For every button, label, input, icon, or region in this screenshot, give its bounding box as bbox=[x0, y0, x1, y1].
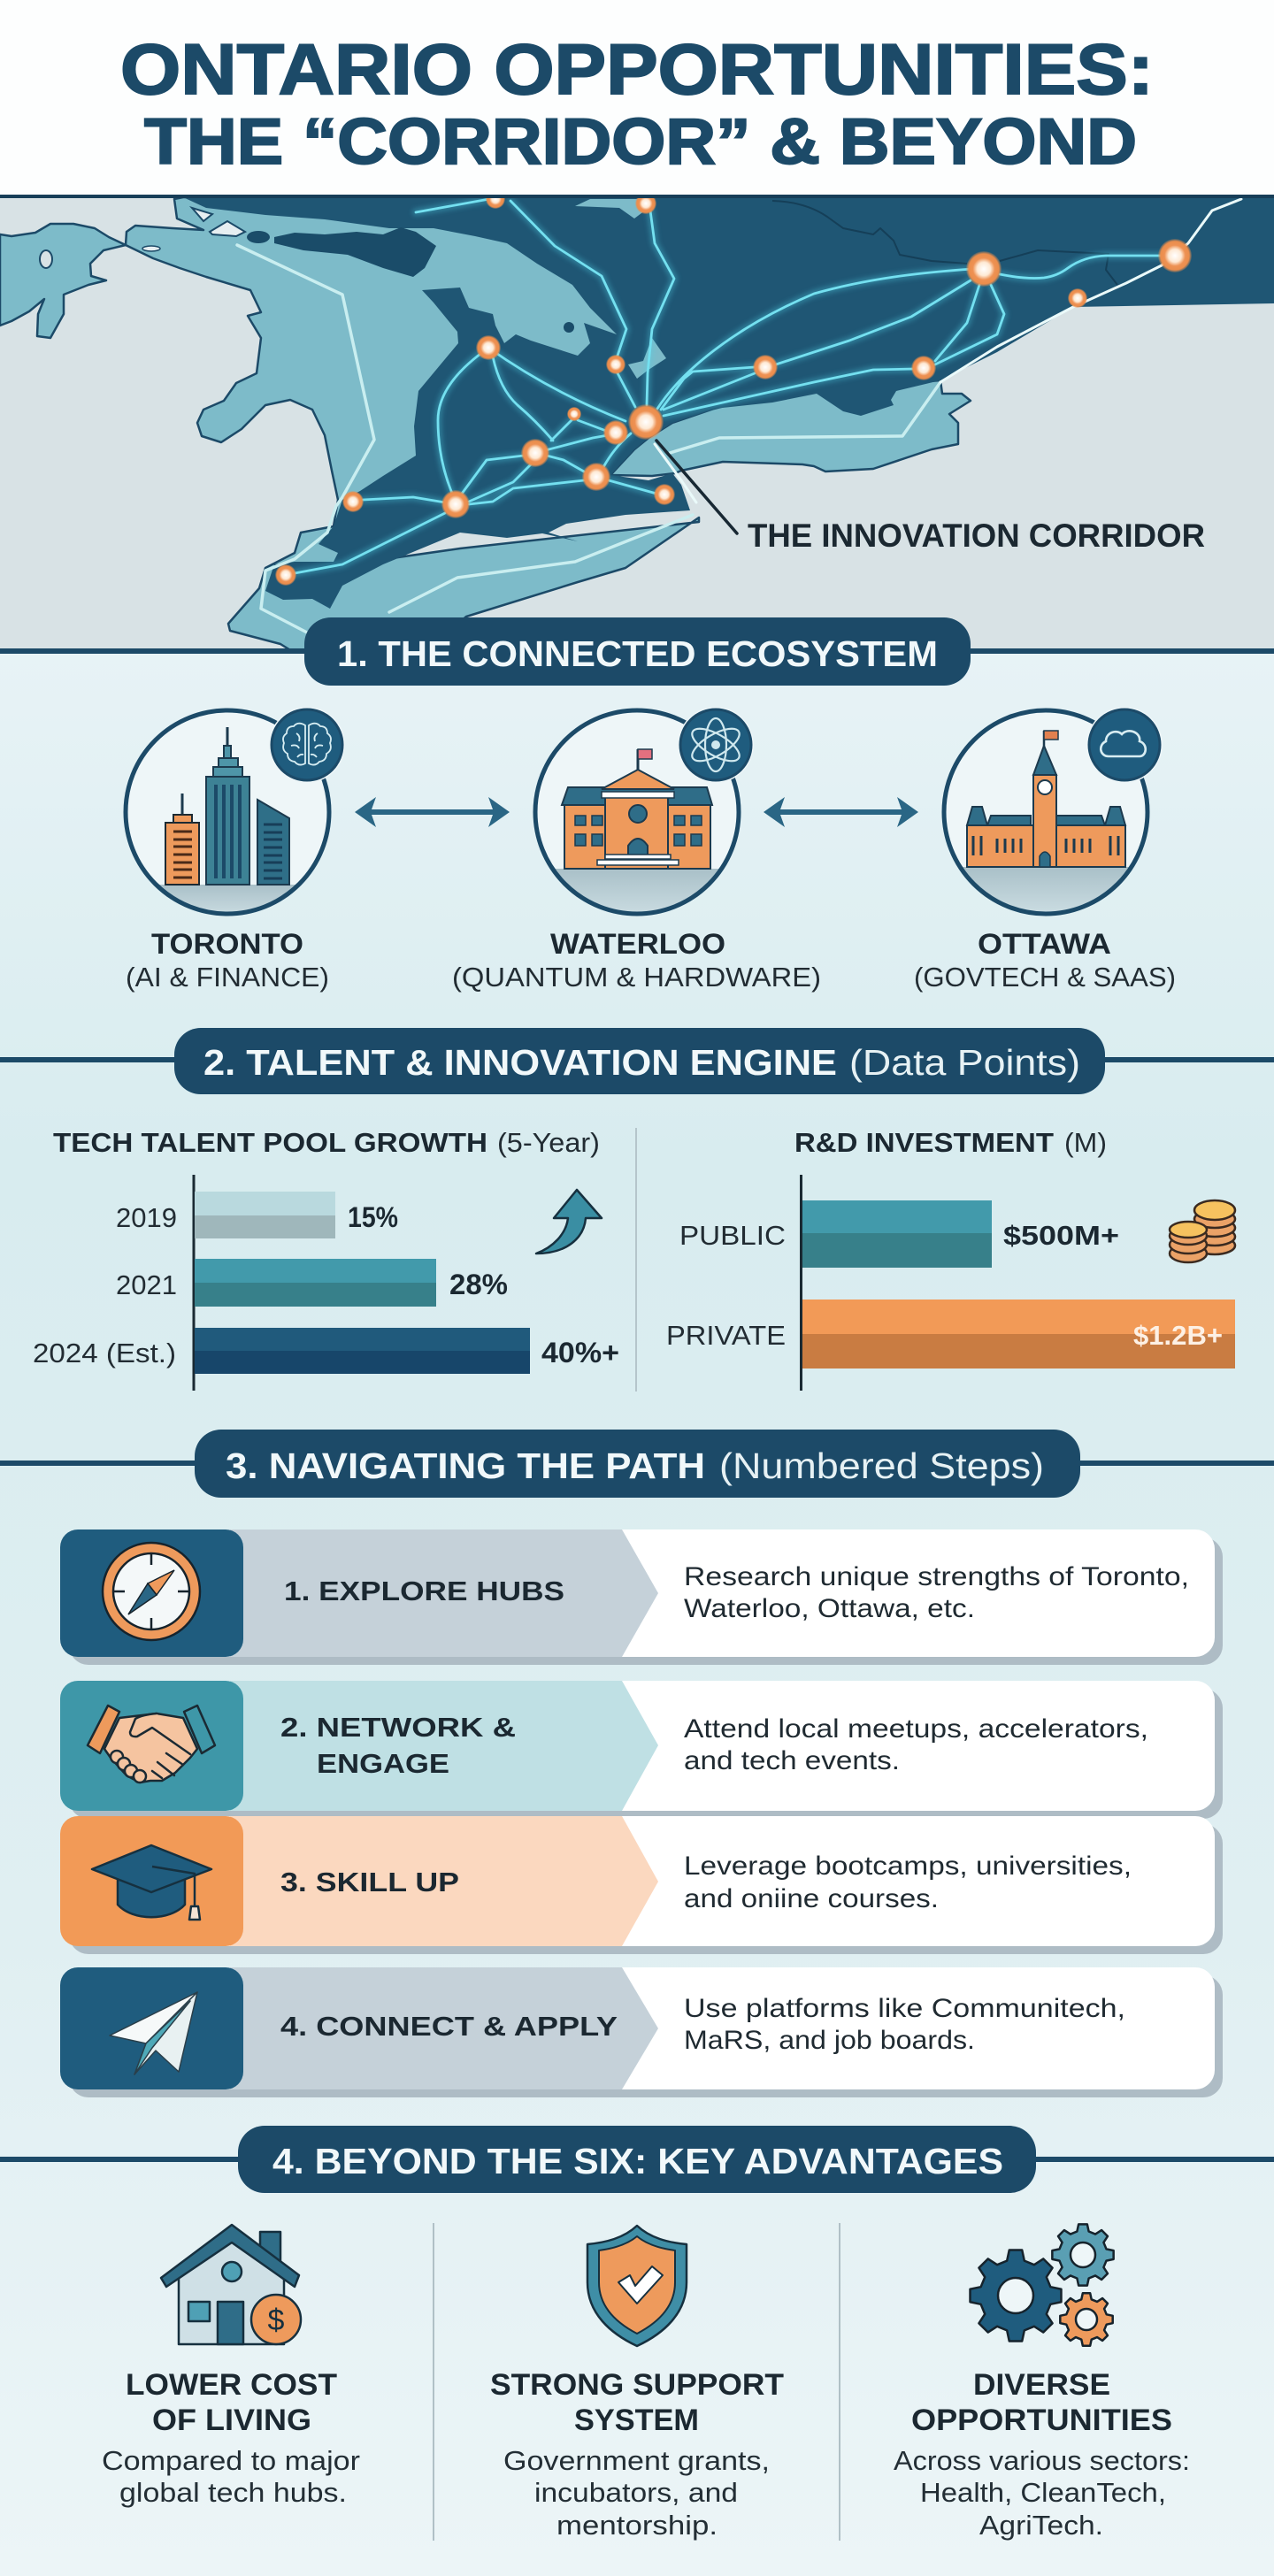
section heading 1 bbox=[304, 617, 971, 686]
icon: handshake bbox=[88, 1706, 215, 1782]
step 3 description bbox=[684, 1852, 1132, 1913]
arrow: Toronto to Waterloo bbox=[355, 797, 510, 827]
bar: 2024 estimate bbox=[33, 1328, 619, 1374]
step 4 description: MaRS, and job boards. bbox=[684, 2026, 975, 2055]
bar: private bbox=[666, 1300, 1235, 1368]
step 1: explore hubs bbox=[60, 1530, 1223, 1665]
chart: R&D investment bbox=[666, 1127, 1235, 1391]
map: Innovation Corridor bbox=[0, 189, 1274, 653]
card text bbox=[894, 2368, 1190, 2541]
city nodes bbox=[275, 189, 1192, 586]
card text: STRONG SUPPORT bbox=[490, 2368, 784, 2402]
label: Ottawa bbox=[914, 928, 1176, 993]
step 3 description: Leverage bootcamps, universities, bbox=[684, 1852, 1132, 1881]
title bbox=[120, 30, 1154, 178]
section heading 3: (Numbered Steps) bbox=[719, 1445, 1044, 1486]
bar: 2019 bbox=[116, 1192, 398, 1238]
bar: 2024 estimate: 2024 (Est.) bbox=[33, 1338, 176, 1368]
dollar sign: $ bbox=[268, 2304, 285, 2337]
step 2 description: Attend local meetups, accelerators, bbox=[684, 1714, 1148, 1744]
step 2: network and engage bbox=[60, 1681, 1223, 1819]
panel: Waterloo hub bbox=[452, 707, 821, 993]
card text: Government grants, bbox=[503, 2445, 770, 2476]
card text: LOWER COST bbox=[126, 2368, 337, 2402]
label: Ottawa: (GOVTECH & SAAS) bbox=[914, 962, 1176, 993]
card text: Compared to major bbox=[102, 2445, 360, 2476]
card text: AgriTech. bbox=[979, 2510, 1103, 2541]
section heading 1: 1. THE CONNECTED ECOSYSTEM bbox=[337, 633, 938, 674]
bar: 2024 estimate: 40%+ bbox=[541, 1337, 619, 1368]
step 3 description: and oniine courses. bbox=[684, 1884, 939, 1913]
step 3 title: 3. SKILL UP bbox=[280, 1867, 459, 1898]
step 1 description bbox=[684, 1562, 1189, 1623]
step 2 description: and tech events. bbox=[684, 1746, 900, 1775]
step 2 title: 2. NETWORK & bbox=[280, 1712, 516, 1743]
icon: growth arrow bbox=[536, 1190, 602, 1254]
bar: private: $1.2B+ bbox=[1133, 1320, 1223, 1351]
chart title: (5-Year) bbox=[497, 1127, 600, 1158]
label: Waterloo bbox=[452, 928, 821, 993]
bar: 2019: 15% bbox=[348, 1201, 398, 1233]
icon: parliament building bbox=[938, 710, 1150, 920]
card text: OPPORTUNITIES bbox=[911, 2404, 1172, 2437]
panel: strong support system bbox=[490, 2226, 784, 2541]
card text: DIVERSE bbox=[973, 2368, 1110, 2402]
card text: SYSTEM bbox=[574, 2404, 699, 2437]
step 4 description bbox=[684, 1994, 1125, 2055]
section heading 4 bbox=[238, 2126, 1036, 2193]
icon: shield bbox=[587, 2226, 687, 2346]
card text: global tech hubs. bbox=[119, 2477, 347, 2508]
icon: cloud badge bbox=[1086, 707, 1163, 783]
card text bbox=[102, 2368, 360, 2508]
step 3: skill up bbox=[60, 1816, 1223, 1954]
chart title: R&D INVESTMENT bbox=[794, 1127, 1054, 1158]
panel: Ottawa hub bbox=[914, 707, 1176, 993]
card text: mentorship. bbox=[556, 2510, 718, 2541]
bar: 2019: 2019 bbox=[116, 1202, 177, 1233]
icon: gears bbox=[971, 2224, 1114, 2346]
icon: Toronto skyline bbox=[124, 708, 331, 916]
icon: coin stacks bbox=[1170, 1200, 1235, 1262]
section heading 2: (Data Points) bbox=[849, 1042, 1080, 1083]
step 1 title: 1. EXPLORE HUBS bbox=[284, 1576, 564, 1606]
icon: atom badge bbox=[678, 707, 754, 783]
label: Waterloo: WATERLOO bbox=[550, 928, 725, 960]
chart title: (M) bbox=[1064, 1127, 1107, 1158]
card text bbox=[490, 2368, 784, 2541]
chart title: TECH TALENT POOL GROWTH bbox=[53, 1127, 487, 1158]
step 4 title: 4. CONNECT & APPLY bbox=[280, 2011, 618, 2042]
icon: paper plane bbox=[110, 1992, 197, 2074]
bar: 2021: 28% bbox=[449, 1269, 508, 1300]
card text: Across various sectors: bbox=[894, 2445, 1190, 2476]
section heading 4: 4. BEYOND THE SIX: KEY ADVANTAGES bbox=[272, 2141, 1003, 2181]
panel: lower cost of living bbox=[102, 2225, 360, 2508]
panel: Toronto hub bbox=[115, 707, 345, 993]
card text: incubators, and bbox=[534, 2477, 738, 2508]
bar: public: $500M+ bbox=[1003, 1220, 1119, 1251]
step 1 description: Research unique strengths of Toronto, bbox=[684, 1562, 1189, 1591]
icon: compass bbox=[103, 1543, 200, 1640]
callout label: innovation corridor: THE INNOVATION CORRIDOR bbox=[748, 518, 1205, 554]
step 4: connect and apply bbox=[60, 1967, 1223, 2097]
bar: 2021: 2021 bbox=[116, 1269, 177, 1300]
step 2 title bbox=[280, 1712, 516, 1779]
icon: university building bbox=[531, 710, 743, 922]
arrow: Waterloo to Ottawa bbox=[764, 797, 918, 827]
card text: OF LIVING bbox=[152, 2404, 311, 2437]
chart: tech talent pool growth bbox=[33, 1127, 619, 1391]
step 2 description bbox=[684, 1714, 1148, 1775]
label: Waterloo: (QUANTUM & HARDWARE) bbox=[452, 962, 821, 993]
section heading 3: 3. NAVIGATING THE PATH bbox=[226, 1445, 705, 1486]
icon: house with dollar coin bbox=[161, 2225, 301, 2344]
bar: public bbox=[679, 1200, 1119, 1268]
label: Toronto: (AI & FINANCE) bbox=[126, 962, 329, 993]
section heading 3 bbox=[195, 1430, 1080, 1498]
panel: diverse opportunities bbox=[894, 2224, 1190, 2541]
label: Ottawa: OTTAWA bbox=[978, 928, 1111, 960]
section heading 2: 2. TALENT & INNOVATION ENGINE bbox=[203, 1042, 837, 1083]
icon: graduation cap bbox=[92, 1845, 211, 1920]
bar: 2021 bbox=[116, 1259, 508, 1307]
step 4 description: Use platforms like Communitech, bbox=[684, 1994, 1125, 2023]
step 1 description: Waterloo, Ottawa, etc. bbox=[684, 1594, 975, 1623]
label: Toronto bbox=[126, 928, 329, 993]
title: ONTARIO OPPORTUNITIES: bbox=[120, 30, 1154, 110]
bar: private: PRIVATE bbox=[666, 1320, 786, 1351]
label: Toronto: TORONTO bbox=[151, 928, 303, 960]
icon: brain badge bbox=[269, 707, 345, 783]
card text: Health, CleanTech, bbox=[920, 2477, 1166, 2508]
header band bbox=[0, 0, 1274, 195]
title: THE “CORRIDOR” & BEYOND bbox=[144, 106, 1137, 178]
bar: public: PUBLIC bbox=[679, 1220, 786, 1251]
section heading 2 bbox=[174, 1028, 1105, 1094]
step 2 title: ENGAGE bbox=[317, 1748, 449, 1779]
